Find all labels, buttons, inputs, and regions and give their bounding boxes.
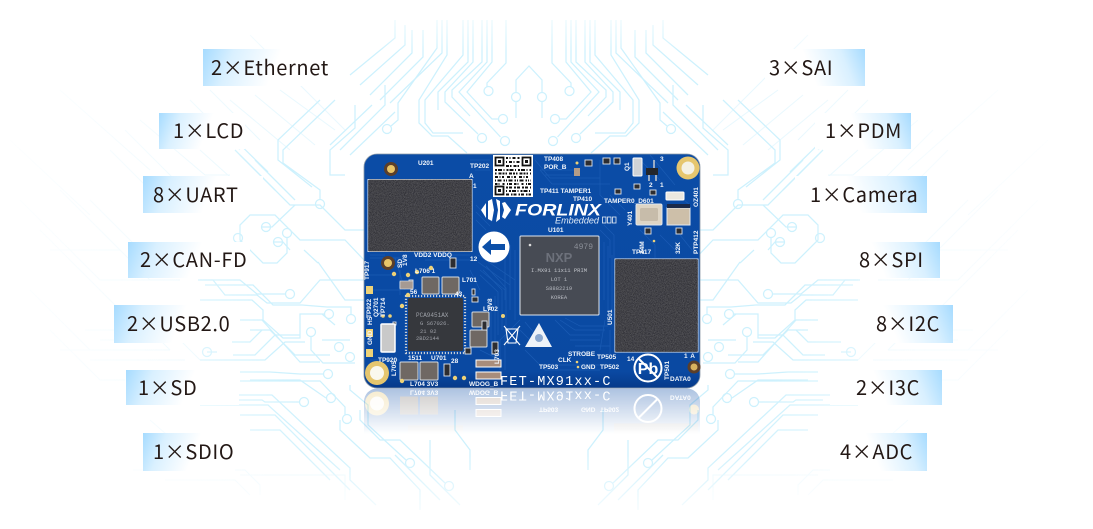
label: 1×PDM: 1×PDM bbox=[825, 115, 902, 144]
silkscreen labels: TP411 TAMPER1 bbox=[540, 188, 592, 195]
silkscreen labels: 43 bbox=[455, 291, 463, 298]
silkscreen labels: 2 bbox=[649, 182, 653, 189]
Pb-free mark bbox=[634, 354, 662, 382]
mounting hole: bottom left bbox=[365, 361, 389, 385]
Forlinx logo: Embedded bbox=[555, 216, 600, 226]
ESD warning triangle bbox=[525, 323, 552, 347]
silkscreen labels: POR_B bbox=[544, 164, 567, 171]
silkscreen labels: L701 bbox=[462, 277, 477, 284]
gold test pads bbox=[366, 162, 655, 383]
silkscreen labels: SD bbox=[397, 259, 404, 268]
inductors bbox=[400, 277, 489, 380]
LPDDR chip U501 bbox=[614, 258, 698, 352]
Pb-free mark: Pb bbox=[638, 361, 658, 378]
board reflection: TP503 bbox=[539, 406, 559, 412]
label: 2×USB2.0: 2×USB2.0 bbox=[127, 308, 230, 337]
PMIC chip: G S67026. bbox=[420, 320, 450, 327]
white capacitor and beige resistors bbox=[381, 168, 580, 379]
silkscreen labels: OZ401 bbox=[693, 187, 700, 207]
silkscreen labels: L703 bbox=[494, 349, 501, 364]
silkscreen labels: GND bbox=[581, 364, 596, 371]
mounting hole: bottom right bbox=[688, 360, 700, 374]
silkscreen labels: TAMPER0_D601 bbox=[604, 198, 654, 205]
mounting hole: mid left bbox=[381, 256, 395, 270]
silkscreen labels: U701 bbox=[431, 355, 447, 362]
label: 8×I2C bbox=[841, 305, 953, 343]
silkscreen labels: 24M bbox=[639, 241, 646, 254]
pcb copper traces bbox=[366, 155, 692, 370]
board reflection: GND bbox=[581, 406, 596, 412]
silkscreen labels: Q1 bbox=[624, 162, 631, 171]
arrow badge bbox=[478, 232, 510, 262]
background: circuit traces bbox=[90, 20, 972, 510]
label: 4×ADC bbox=[830, 433, 927, 471]
silkscreen labels: 32K bbox=[675, 242, 682, 254]
PMIC chip: 2BD2144 bbox=[416, 335, 440, 342]
QR code bbox=[493, 155, 533, 197]
PMIC chip bbox=[406, 296, 465, 353]
crystal and top-right parts bbox=[633, 158, 690, 225]
processor chip U101: KOREA bbox=[551, 294, 568, 301]
processor chip U101: LOT 1 bbox=[551, 276, 568, 283]
silkscreen labels: 1V8 bbox=[402, 254, 409, 266]
label: 1×PDM bbox=[815, 113, 911, 149]
silkscreen labels: L704 3V3 bbox=[410, 381, 439, 388]
silkscreen labels: TP501 bbox=[664, 360, 671, 380]
board reflection: DATA0 bbox=[670, 394, 691, 400]
silkscreen labels: H5 bbox=[367, 316, 374, 325]
label: 2×CAN-FD: 2×CAN-FD bbox=[140, 244, 247, 273]
label: 1×LCD: 1×LCD bbox=[173, 115, 244, 144]
processor chip U101: 4979 bbox=[574, 243, 593, 252]
label: 3×SAI bbox=[765, 49, 865, 86]
board reflection: TP502 bbox=[600, 406, 620, 412]
silkscreen labels: 28 bbox=[451, 358, 459, 365]
processor chip U101: NXP bbox=[546, 250, 573, 265]
memory chip U201 bbox=[368, 179, 472, 252]
silkscreen labels: 1 bbox=[660, 182, 664, 189]
silkscreen labels: STROBE bbox=[568, 351, 596, 358]
board bbox=[364, 154, 700, 390]
silkscreen labels: TP917 bbox=[364, 260, 371, 280]
silkscreen labels: WDOG_B bbox=[469, 381, 499, 388]
PMIC chip: 21 02 bbox=[420, 328, 437, 335]
silkscreen labels: Q2701 bbox=[373, 297, 380, 317]
silkscreen labels: 1 bbox=[473, 183, 477, 190]
silkscreen labels: A bbox=[690, 353, 695, 360]
silkscreen labels: TP410 bbox=[573, 196, 593, 203]
silkscreen labels: VDD2 VDDQ bbox=[414, 252, 452, 259]
silkscreen labels: 0V8 bbox=[487, 298, 494, 310]
silkscreen labels: 1511 bbox=[408, 355, 422, 362]
silkscreen labels: TP502 bbox=[600, 364, 620, 371]
label: 8×UART: 8×UART bbox=[153, 178, 239, 208]
silkscreen labels: L705 bbox=[391, 361, 398, 376]
label: 2×I3C: 2×I3C bbox=[856, 372, 920, 400]
silkscreen labels: TP503 bbox=[539, 364, 559, 371]
label: 8×I2C: 8×I2C bbox=[876, 308, 940, 337]
silkscreen labels: TP714 bbox=[380, 297, 387, 317]
silkscreen labels: TP922 bbox=[366, 298, 373, 318]
silkscreen labels: U501 bbox=[607, 309, 614, 325]
silkscreen labels: PTP412 bbox=[693, 230, 700, 254]
silkscreen labels: 12 bbox=[470, 256, 478, 263]
board reflection: FET-MX91xx-C bbox=[500, 386, 612, 402]
silkscreen labels: 56 bbox=[410, 289, 418, 296]
silkscreen labels: TP920 bbox=[378, 357, 398, 364]
board reflection: L704 3V3 bbox=[410, 388, 439, 396]
label: 1×Camera: 1×Camera bbox=[810, 178, 918, 208]
model name: FET-MX91xx-C bbox=[500, 375, 612, 390]
silkscreen labels: TP202 bbox=[470, 163, 490, 170]
PMIC chip: PCA9451AX bbox=[416, 312, 449, 319]
label: 8×SPI bbox=[829, 242, 940, 278]
processor chip U101 bbox=[520, 236, 599, 315]
processor chip U101: I.MX91 11x11 PRIM bbox=[531, 267, 587, 274]
label: 2×I3C bbox=[830, 370, 942, 405]
module board and reflection bbox=[364, 154, 700, 430]
label: 3×SAI: 3×SAI bbox=[769, 52, 833, 80]
mounting hole: top left bbox=[384, 162, 398, 176]
label: 8×SPI: 8×SPI bbox=[859, 244, 924, 273]
silkscreen labels: CLK bbox=[558, 357, 572, 364]
board reflection bbox=[364, 388, 700, 430]
recycle bin mark bbox=[504, 326, 520, 345]
silkscreen labels: Y401 bbox=[627, 210, 634, 226]
silkscreen labels: A bbox=[469, 173, 474, 180]
label: 2×USB2.0 bbox=[114, 305, 232, 343]
label: 1×SDIO bbox=[143, 433, 235, 471]
label: 8×UART bbox=[143, 176, 263, 213]
label: 2×Ethernet: 2×Ethernet bbox=[211, 52, 329, 80]
label: 1×SDIO: 1×SDIO bbox=[153, 436, 234, 465]
small SMD parts bbox=[393, 158, 682, 376]
silkscreen labels: 3 bbox=[660, 156, 664, 163]
silkscreen labels: L706 1 bbox=[415, 268, 436, 275]
silkscreen labels bbox=[364, 156, 700, 388]
silkscreen labels: TP505 bbox=[597, 354, 617, 361]
label: 1×SD: 1×SD bbox=[138, 372, 197, 400]
processor chip U101: S8882219 bbox=[546, 285, 572, 292]
label: 4×ADC: 4×ADC bbox=[840, 436, 913, 465]
silkscreen labels: TP408 bbox=[544, 156, 564, 163]
silkscreen labels: DATA0 bbox=[670, 376, 691, 383]
board reflection: WDOG_B bbox=[469, 388, 499, 396]
silkscreen labels: GND bbox=[367, 330, 374, 345]
label: 1×Camera bbox=[795, 176, 927, 213]
label: 1×SD bbox=[126, 370, 239, 405]
silkscreen labels: TP417 bbox=[632, 249, 652, 256]
silkscreen labels: L702 bbox=[483, 306, 498, 313]
silkscreen labels: 14 bbox=[627, 356, 635, 363]
Forlinx logo bbox=[481, 199, 616, 226]
pcb base bbox=[364, 154, 700, 388]
mounting hole: top right bbox=[676, 156, 700, 180]
silkscreen labels: U101 bbox=[548, 227, 564, 234]
silkscreen labels: U201 bbox=[418, 160, 434, 167]
silkscreen labels: 1 bbox=[684, 353, 688, 360]
Forlinx logo: FORLINX bbox=[515, 200, 603, 220]
label: 1×LCD bbox=[159, 113, 245, 149]
